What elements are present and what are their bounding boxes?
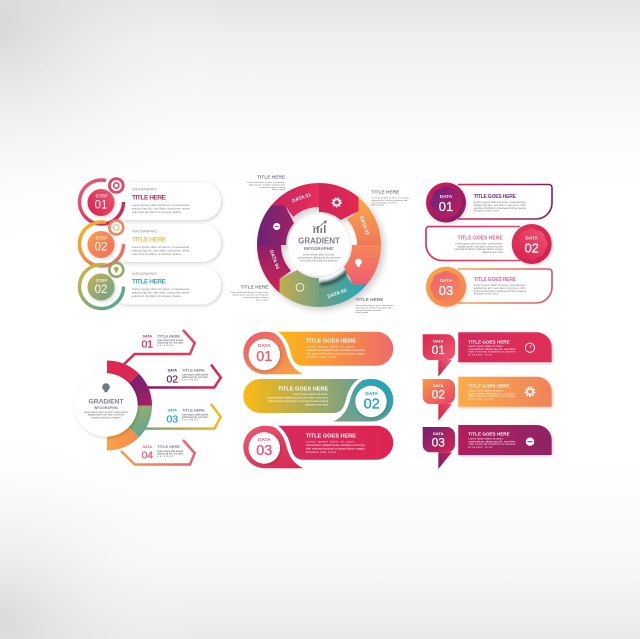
tag row 03: DATA — [433, 431, 444, 436]
data card 02: aliquam erat volut — [482, 250, 503, 254]
icon: bulb badge — [102, 383, 110, 392]
data card 02: adipiscing elit, sed diam nonummy nibh — [457, 244, 503, 248]
entry 04: euismod — [157, 455, 174, 458]
data card 03: adipiscing elit, sed diam nonummy nibh — [474, 286, 526, 290]
data card 01: aliquam erat volut — [474, 209, 499, 213]
entry 03: Lorem ipsum dolor sit amet — [182, 414, 208, 416]
data card 01 — [426, 182, 552, 222]
entry 03: DATA — [168, 409, 177, 413]
tag row 01: TITLE GOES HERE — [468, 339, 510, 344]
tag row 01: Lorem ipsum dolor sit amet, — [468, 344, 504, 348]
callout: bottom right: adipiscing elit, sed diam nonummy nibh — [356, 306, 393, 309]
tag row 02 — [423, 377, 552, 421]
tag row 01 — [423, 332, 552, 377]
panel: teardrop banners — [243, 332, 393, 468]
data card 03: DATA — [440, 278, 453, 284]
step 01 card: STEP — [96, 194, 108, 199]
tag row 02: TITLE GOES HERE — [468, 384, 510, 389]
step 01 card: Lorem ipsum dolor sit amet, consectetuer — [132, 203, 190, 207]
step 02 card: Lorem ipsum dolor sit amet, consectetuer — [132, 245, 190, 249]
centre body: Lorem ipsum dolor sit amet, consectetuer — [84, 411, 128, 414]
tag row 03: TITLE GOES HERE — [468, 432, 510, 437]
entry 02: DATA — [168, 369, 177, 373]
step 03 card: Lorem ipsum dolor sit amet, consectetuer — [132, 287, 190, 291]
centre body: euismod tincidunt ut laoreet — [91, 416, 121, 419]
entry 03: adipiscing elit, sed diam — [182, 416, 208, 419]
callout: top right: Lorem ipsum dolor sit amet, consectetuer — [371, 196, 410, 200]
donut heading: GRADIENT — [298, 237, 340, 246]
donut subheading: INFOGRAPHIC — [304, 246, 334, 251]
data card 01: TITLE GOES HERE — [474, 194, 517, 200]
donut body text: nonummy nibh euismod tincidunt. — [300, 258, 339, 262]
data card 01: euismod tincidunt ut laoreet dolore magna — [474, 206, 526, 210]
arrow 02 — [146, 364, 221, 388]
tag row 03: aliquam erat — [468, 445, 493, 449]
tag row 03: consectetuer adipiscing elit, sed diam — [468, 439, 515, 443]
callout: bottom right: euismod tincidunt ut laoreet — [356, 309, 381, 312]
entry 01: Lorem ipsum dolor sit amet — [157, 339, 184, 342]
callout: bottom left: Lorem ipsum dolor sit amet, consectetuer — [230, 291, 269, 294]
banner 03: DATA — [258, 437, 271, 443]
step 01 card: adipiscing elit, sed diam nonummy nibhe — [132, 206, 190, 210]
arrow 01 — [124, 330, 195, 364]
arrow 03 — [145, 404, 221, 429]
banner 01: aliquam erat volut — [306, 355, 336, 359]
data card 01: 01 — [439, 199, 453, 214]
step 03 card: STEP — [96, 278, 108, 283]
banner 02: aliquam erat volut — [305, 402, 328, 406]
tag row 01: 01 — [432, 343, 445, 357]
banner 02: 02 — [364, 397, 380, 413]
centre body — [84, 411, 128, 419]
donut segment labels: DATA 02 — [358, 215, 370, 236]
entry 02 — [166, 368, 208, 385]
data card 01: DATA — [440, 194, 453, 200]
banner 02: DATA — [365, 391, 379, 397]
callout: top left: euismod tincidunt ut laoreet — [260, 186, 285, 189]
banner 01: 01 — [256, 349, 272, 365]
tag row 02: aliquam erat — [468, 397, 493, 401]
banner 03: consectetuer adipiscing elit, sed diam nonummy — [306, 443, 365, 447]
banner 03: aliquam erat volut — [306, 450, 336, 454]
entry 01 — [141, 334, 184, 351]
icon: circle — [296, 283, 304, 291]
tag row 01: aliquam erat — [468, 352, 493, 356]
step 03 card: euismod tincidunt ut laoreet dolore. — [132, 294, 182, 298]
callout: bottom right: TITLE HERE — [356, 297, 384, 303]
step 02 card: adipiscing elit, sed diam nonummy nibhe — [132, 248, 190, 252]
data card 03: Lorem ipsum dolor sit amet, consectetuer — [474, 283, 526, 287]
icon: growth chart — [313, 220, 327, 233]
data card 03 — [426, 267, 552, 307]
banner 03: 03 — [256, 443, 272, 459]
banner 02: Lorem ipsum dolor sit amet, — [293, 392, 328, 396]
data card 01: adipiscing elit, sed diam nonummy nibh — [474, 203, 526, 207]
donut body text — [298, 252, 340, 262]
step 01 card: INFOGRAPHIC — [132, 188, 158, 192]
centre body: adipiscing elit sed diam nonummy — [88, 414, 125, 417]
step 03 card: 02 — [95, 284, 107, 296]
callout: bottom left: TITLE HERE — [241, 285, 269, 291]
data card 03: aliquam erat volut — [474, 292, 499, 296]
tag row 01: DATA — [433, 338, 444, 343]
step 02 card: STEP — [96, 236, 108, 241]
panel: step list — [80, 177, 221, 309]
entry 03: euismod — [182, 418, 199, 422]
entry 02: euismod — [182, 378, 199, 382]
banner 03 — [243, 426, 393, 468]
tag row 02: Lorem ipsum dolor sit amet, — [468, 388, 504, 392]
banner 02: nibh euismod tincidunt ut laoreet dolore magna — [268, 399, 329, 403]
tag row 03: nibh euismod tincidunt ut laoreet — [468, 442, 516, 446]
banner 01: nibh euismod tincidunt ut laoreet dolore magna — [306, 352, 365, 356]
banner 02 — [243, 379, 393, 422]
icon: bulb — [355, 259, 362, 267]
callout: top left: TITLE HERE — [257, 174, 286, 180]
centre heading: GRADIENT — [89, 399, 124, 406]
callout: top left: adipiscing elit, sed diam nonummy nibh — [249, 183, 286, 186]
step 02 card: euismod tincidunt ut laoreet dolore. — [132, 252, 182, 256]
tag row 03 — [423, 425, 552, 469]
donut centre disc — [288, 214, 350, 276]
tag row 02: 02 — [432, 387, 445, 401]
donut segment labels — [268, 192, 370, 300]
entry 04: 04 — [141, 450, 153, 462]
callout: bottom left: adipiscing elit, sed diam nonummy nibh — [232, 294, 269, 297]
entry 01: TITLE HERE — [157, 334, 180, 338]
data card 02 — [426, 224, 552, 264]
entry 03: TITLE HERE — [182, 408, 205, 413]
callout: bottom right: dolore magna — [356, 311, 369, 314]
banner 03: nibh euismod tincidunt ut laoreet dolore magna — [306, 446, 365, 450]
entry 02: Lorem ipsum dolor sit amet — [182, 374, 208, 376]
callout: bottom right: Lorem ipsum dolor sit amet, consectetuer — [356, 304, 394, 307]
panel: outlined data cards — [426, 182, 552, 307]
donut body text: Lorem ipsum dolor sit amet, — [303, 252, 335, 256]
data card 01: Lorem ipsum dolor sit amet, consectetuer — [474, 200, 526, 204]
step 01 card: TITLE HERE — [132, 194, 167, 202]
banner 01: Lorem ipsum dolor sit amet, — [306, 344, 356, 348]
entry 04: DATA — [143, 445, 152, 449]
callout: top left: Lorem ipsum dolor sit amet, consectetuer — [247, 181, 285, 184]
callout: top right: euismod tincidunt ut laoreet — [371, 201, 397, 204]
step 03 card — [80, 262, 221, 309]
panel: tag banners — [423, 332, 552, 469]
banner 01: consectetuer adipiscing elit, sed diam nonummy — [306, 348, 365, 352]
tag row 01: nibh euismod tincidunt ut laoreet — [468, 350, 516, 354]
callout: bottom left: euismod tincidunt ut laoreet — [243, 296, 269, 299]
callout: top left — [247, 174, 286, 191]
entry 04: Lorem ipsum dolor sit amet — [157, 450, 184, 453]
entry 02: TITLE HERE — [182, 368, 205, 373]
data card 02: 02 — [524, 240, 539, 256]
banner 03: TITLE GOES HERE — [306, 434, 356, 440]
data card 03: euismod tincidunt ut laoreet dolore magna — [474, 289, 526, 293]
banner 02: TITLE GOES HERE — [278, 386, 329, 392]
callout: top right: TITLE HERE — [371, 190, 400, 196]
centre subheading: INFOGRAPHIC — [94, 406, 119, 410]
banner 01: TITLE GOES HERE — [306, 339, 356, 345]
donut body text: consectetuer adipiscing elit sed diam — [298, 256, 340, 260]
step 01 card: euismod tincidunt ut laoreet dolore. — [132, 210, 182, 214]
step 02 card: INFOGRAPHIC — [132, 230, 158, 234]
step 03 card: TITLE HERE — [132, 279, 167, 286]
callout: top right: dolore magna — [371, 204, 385, 207]
step 03 card: INFOGRAPHIC — [132, 272, 158, 276]
icon: dots — [273, 223, 280, 230]
banner 01: DATA — [258, 343, 271, 349]
step 03 card: adipiscing elit, sed diam nonummy nibhe — [132, 290, 190, 294]
step 02 card: 02 — [95, 242, 107, 254]
donut ring — [257, 183, 381, 307]
entry 01: DATA — [143, 334, 152, 338]
callout: bottom left — [230, 285, 269, 301]
donut segment labels: DATA 04 — [268, 249, 280, 270]
tag row 03: 03 — [432, 435, 445, 449]
icon: gear — [332, 198, 341, 207]
data card 02: TITLE GOES HERE — [458, 235, 503, 241]
step 01 card — [80, 177, 221, 224]
banner 03: Lorem ipsum dolor sit amet, — [306, 440, 356, 444]
data card 02: DATA — [525, 235, 539, 241]
entry 04: TITLE HERE — [157, 444, 180, 449]
data card 03: 03 — [439, 283, 453, 298]
banner 01 — [243, 332, 393, 374]
banner 02: consectetuer adipiscing elit, sed diam nonummy — [267, 396, 329, 400]
callout: bottom right — [356, 297, 394, 314]
step 02 card: TITLE HERE — [132, 236, 167, 244]
donut segment labels: DATA 03 — [327, 288, 348, 300]
data card 02: Lorem ipsum dolor sit amet, consectetuer — [455, 242, 503, 246]
panel: gradient donut chart — [230, 174, 410, 314]
entry 01: adipiscing elit, sed diam — [157, 342, 183, 344]
step 01 card: 01 — [95, 200, 107, 212]
quarter ring — [107, 360, 152, 451]
tag row 02: DATA — [433, 383, 444, 388]
arrow 04 — [121, 440, 195, 464]
tag row 02: consectetuer adipiscing elit, sed diam — [468, 391, 515, 395]
donut segment labels: DATA 01 — [291, 192, 312, 204]
entry 01: euismod — [157, 344, 174, 347]
tag row 03: Lorem ipsum dolor sit amet, — [468, 436, 504, 440]
callout: top right — [371, 190, 410, 207]
callout: top right: adipiscing elit, sed diam nonummy nibh — [371, 199, 409, 202]
entry 04: adipiscing elit, sed diam — [157, 452, 183, 456]
entry 04 — [141, 444, 184, 462]
data card 02: euismod tincidunt ut laoreet dolore magna — [454, 247, 503, 251]
callout: top left: dolore magna — [272, 188, 286, 191]
entry 02: 02 — [166, 373, 178, 385]
callout: bottom left: dolore magna — [256, 298, 269, 301]
entry 03 — [166, 408, 208, 425]
tag row 01: consectetuer adipiscing elit, sed diam — [468, 347, 515, 351]
entry 03: 03 — [166, 413, 178, 425]
entry 01: 01 — [141, 339, 153, 351]
data card 03: TITLE GOES HERE — [474, 277, 517, 283]
entry 02: adipiscing elit, sed diam — [182, 376, 208, 379]
step 02 card — [80, 219, 221, 266]
tag row 02: nibh euismod tincidunt ut laoreet — [468, 394, 516, 398]
centre disc — [74, 373, 138, 437]
panel: radial arrows — [74, 330, 221, 464]
